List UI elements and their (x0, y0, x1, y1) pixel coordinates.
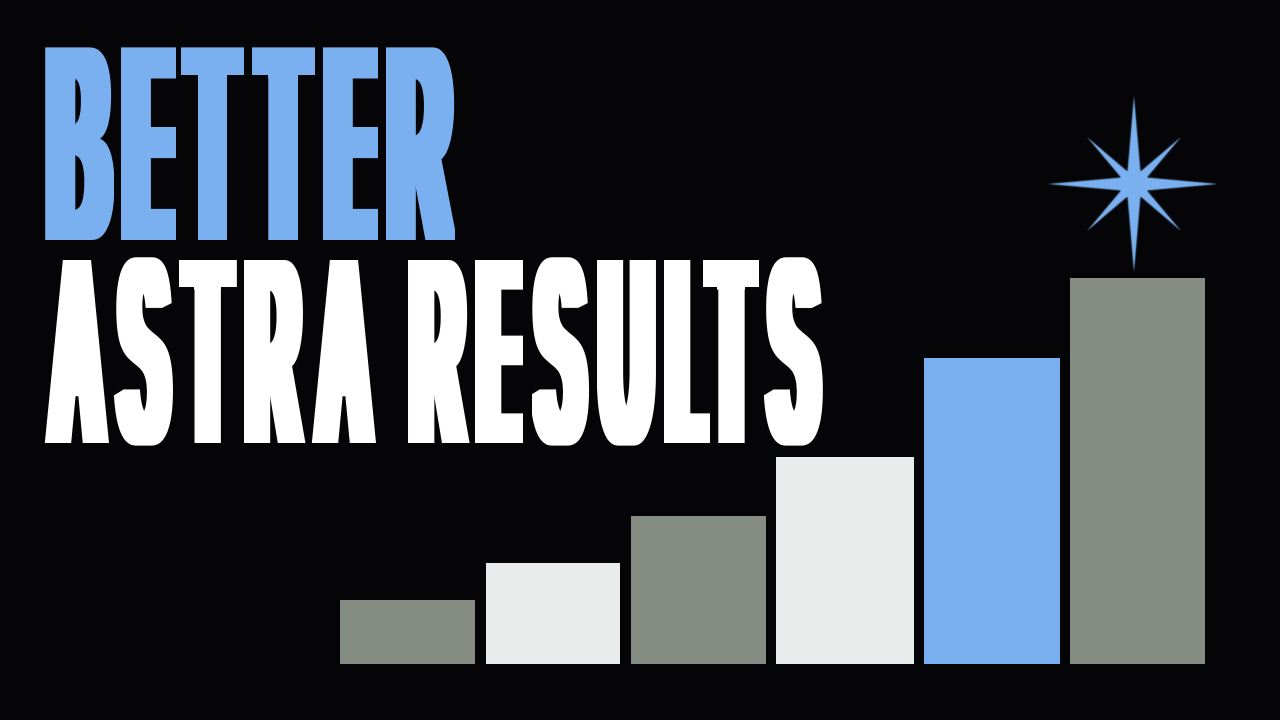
bar 6 (1070, 278, 1205, 664)
icon: eight-point star (1048, 96, 1218, 272)
bar 5 (924, 358, 1060, 664)
bar 4 (776, 457, 914, 664)
bar 3 (631, 516, 766, 664)
bar 1 (340, 600, 475, 664)
bar 2 (486, 563, 620, 664)
bar chart: rising bars (340, 278, 1205, 664)
title line 2: ASTRA RESULTS: ASTRA RESULTS (51, 204, 818, 500)
